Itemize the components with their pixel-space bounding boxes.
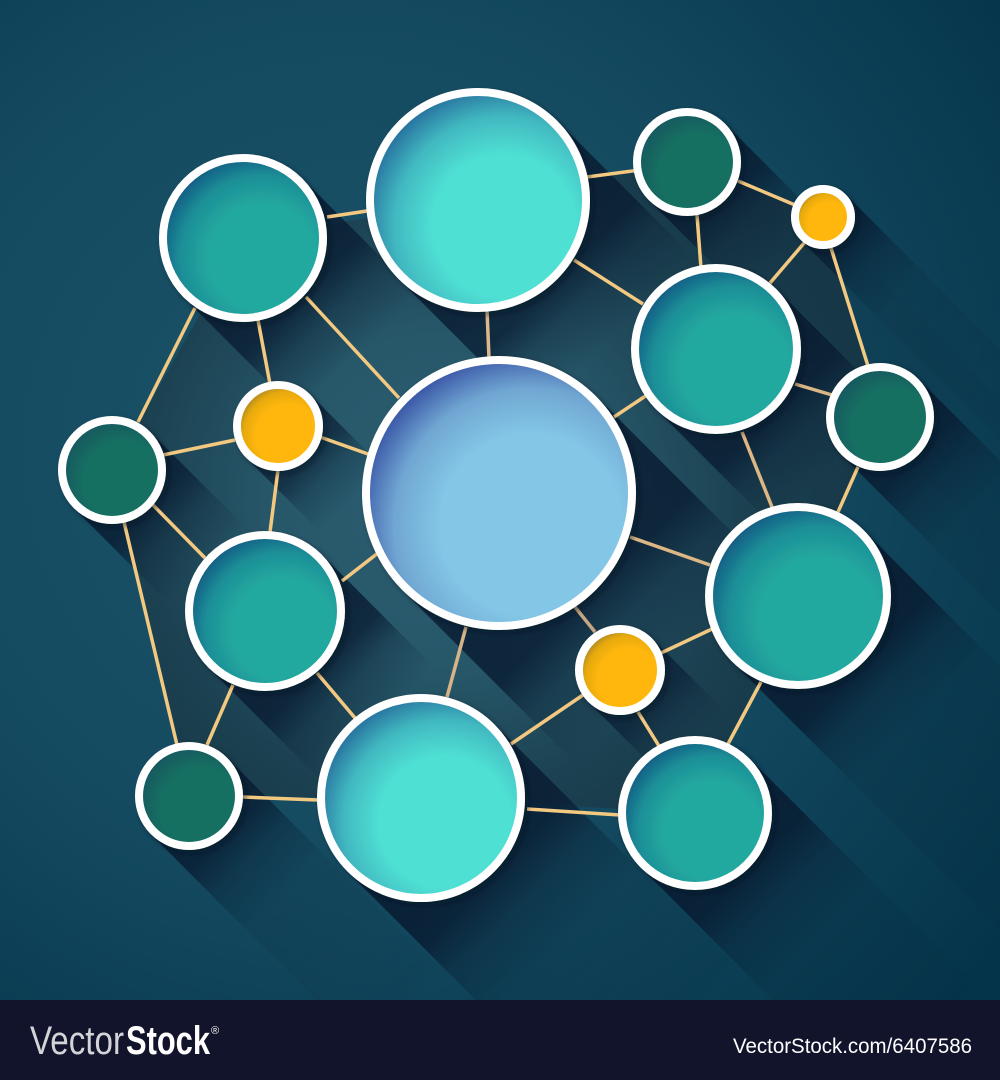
node: central blue circle: [366, 360, 632, 626]
footer image id text: VectorStock.com/6407586: [733, 1035, 972, 1058]
node: top right yellow circle: [795, 189, 851, 245]
node: top green circle: [637, 112, 737, 212]
footer logo: VectorStock: Stock: [126, 1019, 211, 1063]
node: bottom large cyan circle: [321, 698, 521, 898]
node: lower left teal circle: [189, 535, 341, 687]
node: left yellow circle: [237, 385, 319, 467]
node: far left green circle: [62, 420, 162, 520]
node: bottom left green circle: [139, 746, 239, 846]
node: upper left teal circle: [163, 158, 323, 318]
footer logo: VectorStock: ®: [211, 1025, 219, 1037]
connector lines: [124, 170, 868, 815]
node: top large cyan circle: [370, 92, 586, 308]
footer logo: VectorStock: Vector: [30, 1019, 124, 1063]
footer bar: [0, 1000, 1000, 1080]
long faint diagonal shadows of the outer nodes: [112, 162, 1000, 1038]
short soft node shadows: [112, 162, 975, 942]
node: upper right teal circle: [635, 268, 797, 430]
node: right green circle: [830, 367, 930, 467]
node: lower yellow circle: [579, 629, 661, 711]
node: bottom right teal circle: [622, 740, 768, 886]
node: right large teal circle: [709, 507, 887, 685]
network hull panel: [112, 162, 880, 813]
footer logo: VectorStock: [30, 1019, 219, 1063]
